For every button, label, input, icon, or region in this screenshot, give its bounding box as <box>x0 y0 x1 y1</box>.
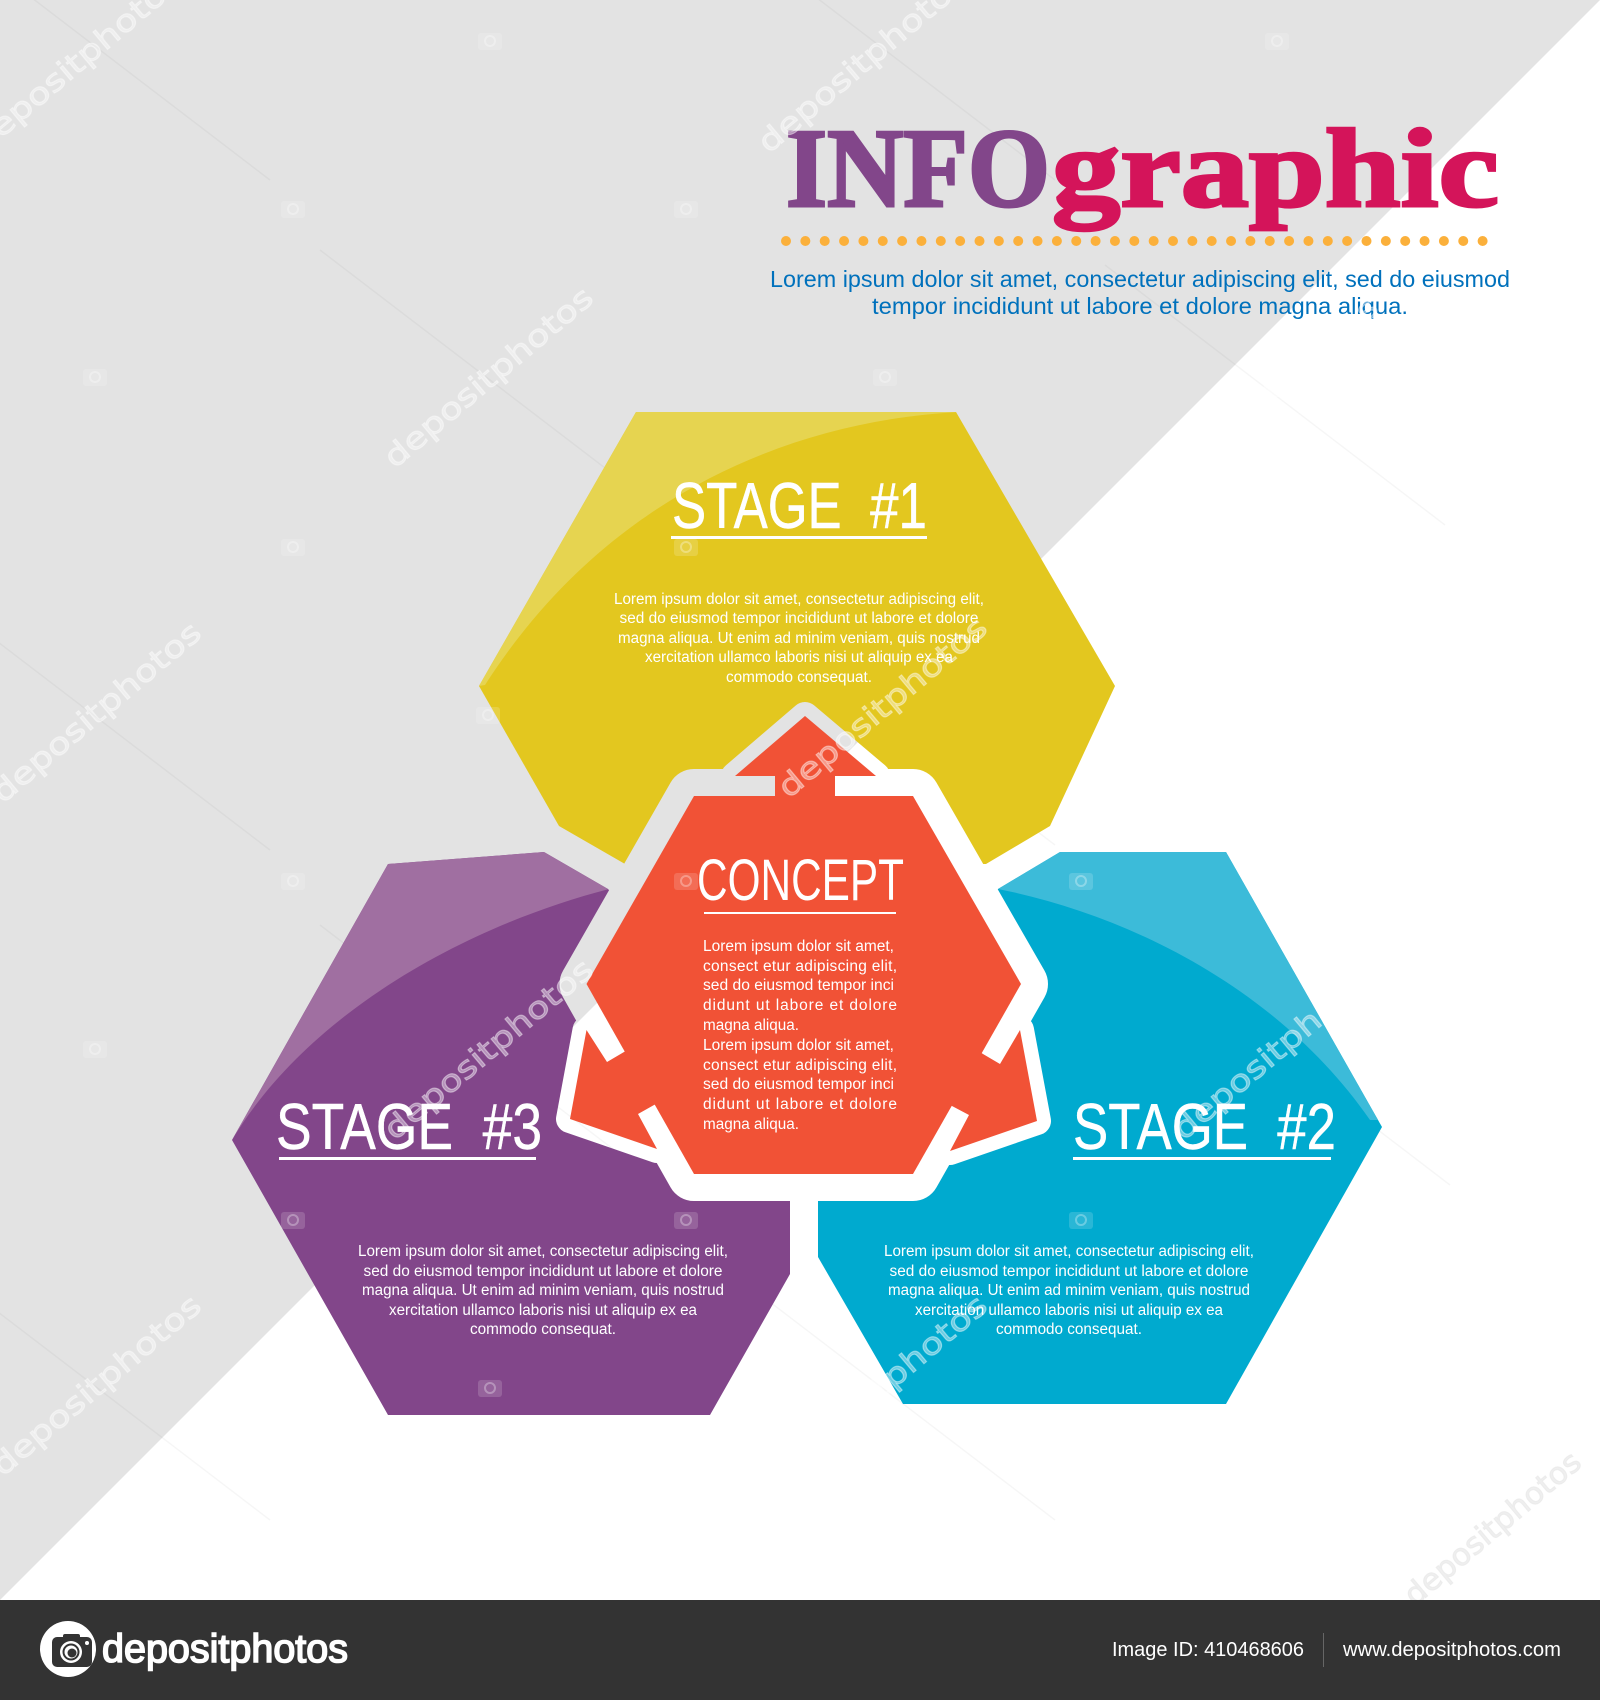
stage 2 text: xercitation ullamco laboris nisi ut aliquip ex ea <box>915 1302 1223 1319</box>
watermark overlay: depositphotos <box>771 610 994 805</box>
subtitle: Lorem ipsum dolor sit amet, consectetur adipiscing elit, sed do eiusmod <box>770 266 1510 292</box>
stage 1 text: Lorem ipsum dolor sit amet, consectetur adipiscing elit, <box>614 591 984 608</box>
stage 3 text: magna aliqua. Ut enim ad minim veniam, quis nostrud <box>362 1282 724 1299</box>
stage 1 hexagon <box>479 412 1115 864</box>
stage 3 hexagon <box>232 852 790 1415</box>
arrow: to stage 2 <box>938 1030 1037 1151</box>
concept text: sed do eiusmod tempor inci <box>703 977 894 994</box>
stage 2 text: commodo consequat. <box>996 1321 1142 1338</box>
watermark overlay: depositphotos <box>771 1288 994 1483</box>
watermark overlay: depositphotos <box>377 280 600 475</box>
concept text: Lorem ipsum dolor sit amet, <box>703 1037 894 1054</box>
title: graphic <box>1052 107 1499 231</box>
panel: stage 1 <box>479 412 1115 864</box>
panel: concept <box>570 716 1037 1174</box>
stage 1 text: commodo consequat. <box>726 669 872 686</box>
watermark overlay: depositphotos <box>751 0 974 160</box>
panel: stage 2 <box>818 852 1382 1404</box>
stage 3 text: xercitation ullamco laboris nisi ut aliquip ex ea <box>389 1302 697 1319</box>
arrow: up to stage 1 <box>735 716 876 810</box>
stage 3 text: sed do eiusmod tempor incididunt ut labore et dolore <box>364 1263 722 1280</box>
concept text: magna aliqua. <box>703 1116 799 1133</box>
stage 3 heading: STAGE #3 <box>276 1090 542 1163</box>
footer url: www.depositphotos.com <box>1342 1639 1561 1661</box>
concept text: magna aliqua. <box>703 1017 799 1034</box>
stage 1 text: sed do eiusmod tempor incididunt ut labore et dolore <box>620 610 978 627</box>
footer bar <box>0 1600 1600 1700</box>
stage 1 heading: STAGE #1 <box>672 469 927 542</box>
concept heading: CONCEPT <box>697 848 904 913</box>
stage 2 heading: STAGE #2 <box>1073 1090 1336 1163</box>
title: INFO <box>786 107 1050 231</box>
dotted rule <box>786 236 1490 246</box>
concept text: Lorem ipsum dolor sit amet, <box>703 938 894 955</box>
image id: Image ID: 410468606 <box>1112 1639 1304 1661</box>
panel: stage 3 <box>232 852 790 1415</box>
arrow: to stage 3 <box>570 1030 670 1149</box>
concept text: didunt ut labore et dolore <box>703 1096 897 1113</box>
stage 2 text: sed do eiusmod tempor incididunt ut labore et dolore <box>890 1263 1248 1280</box>
concept hexagon <box>586 796 1021 1174</box>
stage 3 text: Lorem ipsum dolor sit amet, consectetur adipiscing elit, <box>358 1243 728 1260</box>
concept text: didunt ut labore et dolore <box>703 997 897 1014</box>
stage 3 text <box>358 1243 728 1338</box>
watermark overlay: depositphotos <box>1162 290 1385 485</box>
subtitle: tempor incididunt ut labore et dolore magna aliqua. <box>872 293 1408 319</box>
stage 1 text: xercitation ullamco laboris nisi ut aliquip ex ea <box>645 649 953 666</box>
concept text: sed do eiusmod tempor inci <box>703 1076 894 1093</box>
concept text: consect etur adipiscing elit, <box>703 958 897 975</box>
stage 1 text <box>614 591 984 686</box>
concept text: consect etur adipiscing elit, <box>703 1057 897 1074</box>
watermark overlay: depositphotos <box>377 952 600 1147</box>
stage 1 text: magna aliqua. Ut enim ad minim veniam, quis nostrud <box>618 630 980 647</box>
stage 2 text: Lorem ipsum dolor sit amet, consectetur adipiscing elit, <box>884 1243 1254 1260</box>
icon: camera logo <box>40 1621 96 1677</box>
watermark overlay: depositphotos <box>1166 952 1389 1147</box>
stage 2 text <box>884 1243 1254 1338</box>
concept text <box>703 938 897 1133</box>
stage 2 hexagon <box>818 852 1382 1404</box>
watermark overlay: depositphotos <box>1397 1445 1588 1613</box>
stage 2 text: magna aliqua. Ut enim ad minim veniam, quis nostrud <box>888 1282 1250 1299</box>
title <box>786 107 1499 231</box>
footer logo text: depositphotos <box>102 1627 348 1671</box>
subtitle <box>770 266 1510 319</box>
stage 3 text: commodo consequat. <box>470 1321 616 1338</box>
